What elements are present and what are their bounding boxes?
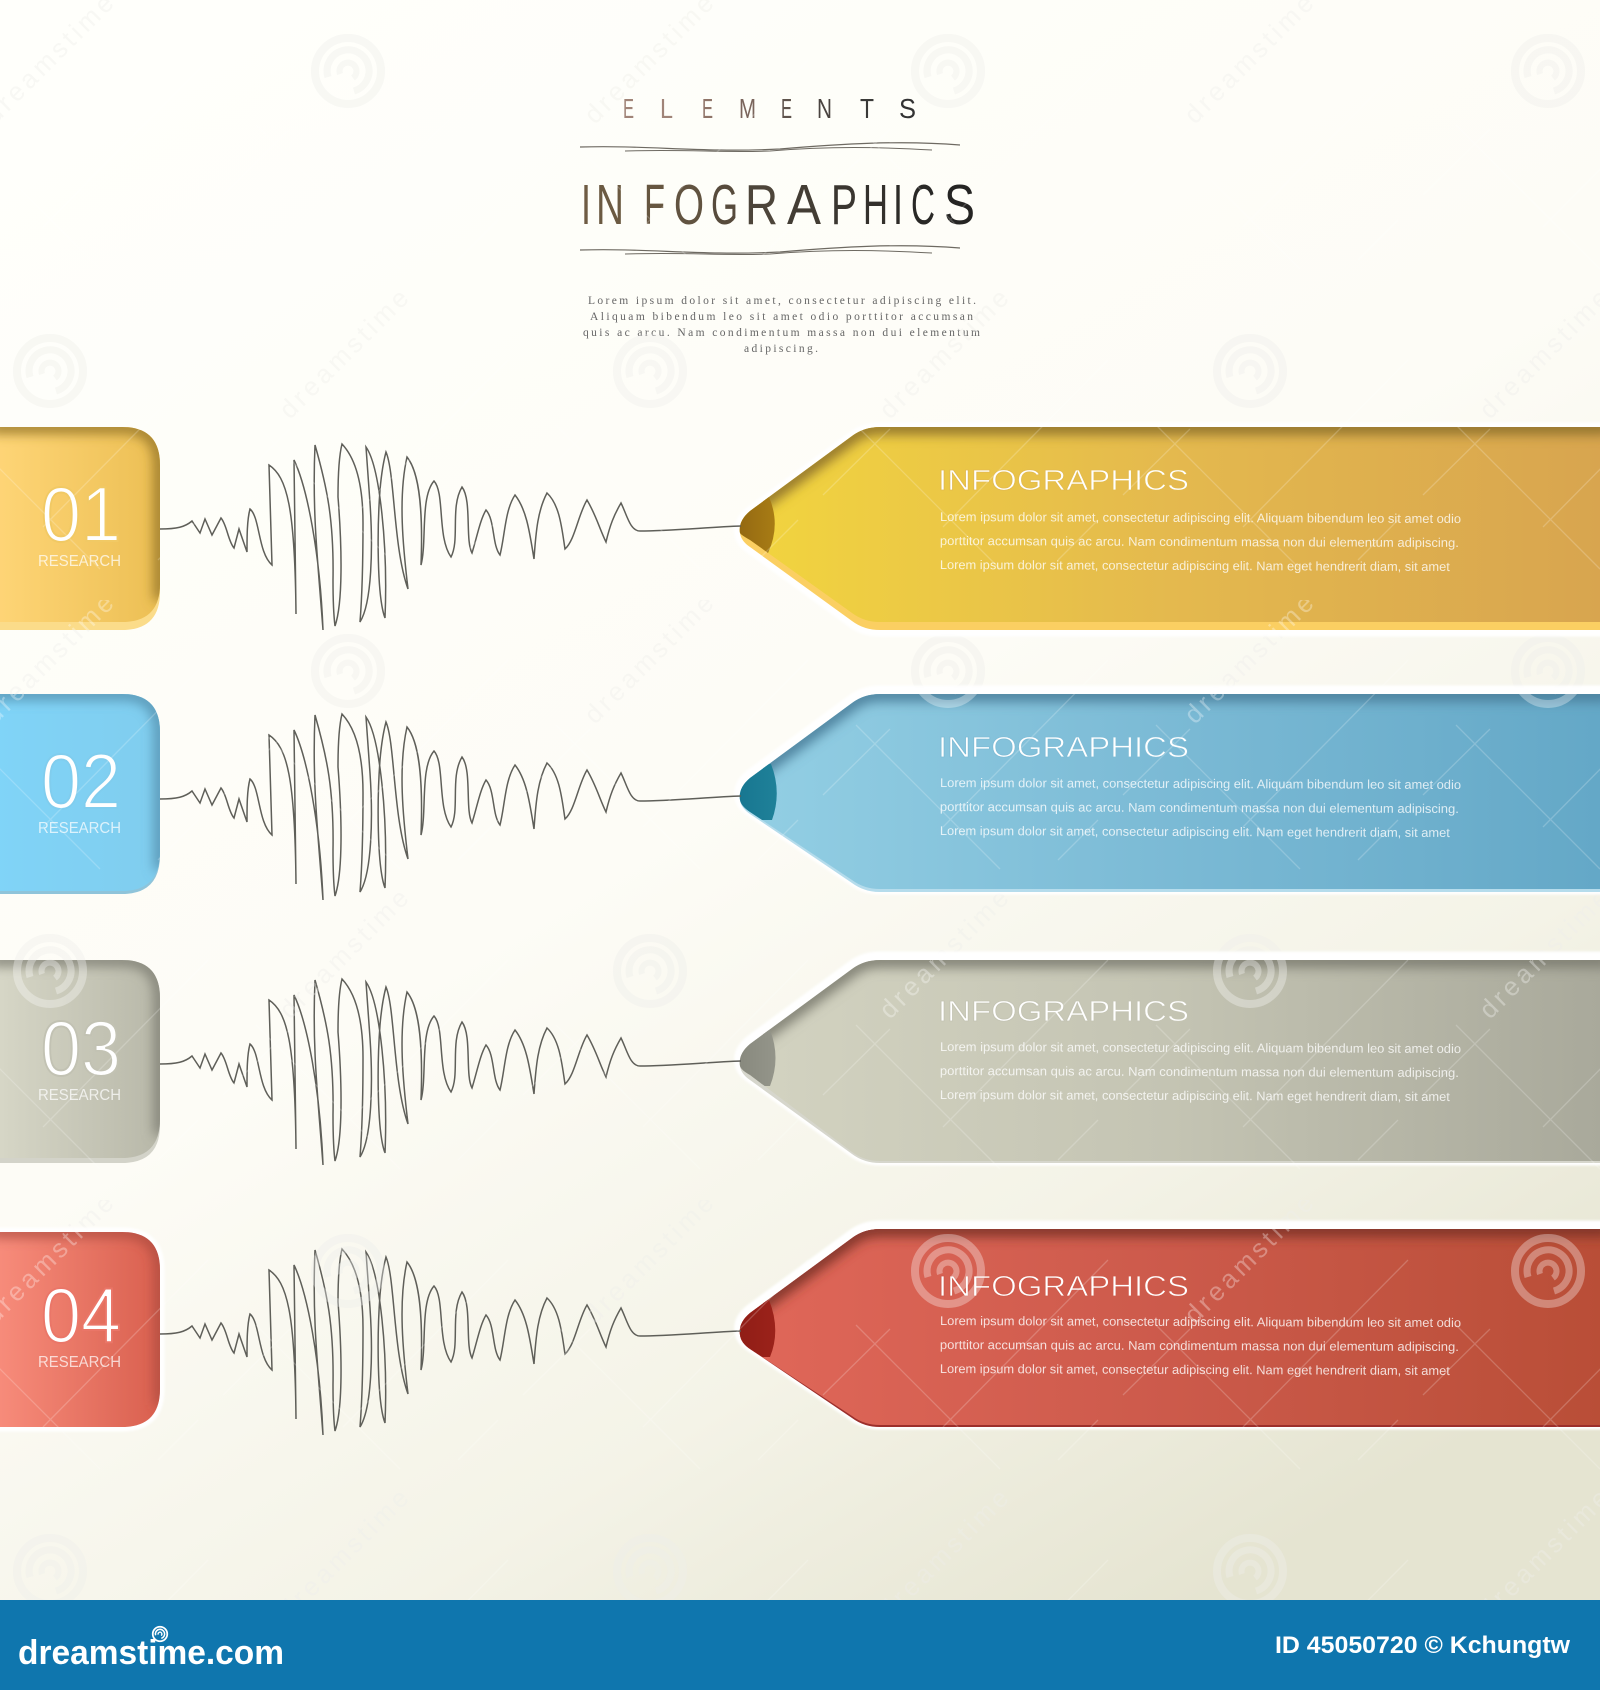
- heading: elements: L: [660, 93, 673, 124]
- footer image id: ID 45050720 © Kchungtw: [1275, 1632, 1570, 1659]
- pencil arrow panel 2: porttitor accumsan quis ac arcu. Nam condimentum massa non dui elementum adipiscing.: [940, 800, 1459, 816]
- pencil arrow panel 2: [700, 691, 1600, 892]
- intro paragraph: [583, 295, 980, 355]
- pencil arrow panel 2: Lorem ipsum dolor sit amet, consectetur adipiscing elit. Nam eget hendrerit diam, sit amet: [940, 824, 1450, 840]
- number tab 01: [0, 427, 160, 630]
- intro paragraph: Lorem ipsum dolor sit amet, consectetur adipiscing elit.: [588, 295, 976, 307]
- number tab 02: RESEARCH: [38, 820, 121, 837]
- heading: infographics: [581, 173, 975, 237]
- heading: elements: [623, 93, 916, 124]
- number tab 02: 02: [41, 737, 121, 825]
- row 3: grey: [0, 957, 1600, 1165]
- waveform line 1: [160, 444, 741, 630]
- heading: infographics: I: [581, 173, 591, 237]
- number tab 04: [0, 1232, 160, 1427]
- heading: elements: S: [899, 93, 916, 124]
- number tab 04: RESEARCH: [38, 1354, 121, 1371]
- heading: infographics: G: [711, 173, 738, 237]
- number tab 02: [0, 694, 160, 894]
- heading: infographics: R: [745, 173, 778, 237]
- pencil arrow panel 4: Lorem ipsum dolor sit amet, consectetur adipiscing elit. Aliquam bibendum leo sit amet odio: [940, 1314, 1461, 1330]
- intro paragraph: Aliquam bibendum leo sit amet odio porttitor accumsan: [590, 311, 973, 323]
- heading: infographics: H: [863, 173, 888, 237]
- footer logo spiral: [153, 1627, 167, 1641]
- heading: infographics: I: [893, 173, 903, 237]
- pencil arrow panel 4: porttitor accumsan quis ac arcu. Nam condimentum massa non dui elementum adipiscing.: [940, 1338, 1459, 1354]
- pencil arrow panel 2: INFOGRAPHICS: [938, 732, 1189, 764]
- row 4: red: [0, 1226, 1600, 1435]
- heading: elements: T: [860, 93, 874, 124]
- pencil arrow panel 4: [700, 1226, 1600, 1427]
- pencil arrow panel 4: INFOGRAPHICS: [938, 1271, 1189, 1303]
- waveform line 3: [160, 979, 741, 1165]
- heading: elements: E: [781, 93, 792, 124]
- heading: elements: M: [739, 93, 756, 124]
- number tab 01: RESEARCH: [38, 553, 121, 570]
- number tab 03: RESEARCH: [38, 1087, 121, 1104]
- number tab 03: [0, 960, 160, 1163]
- lower hand-drawn rule: [580, 246, 960, 255]
- number tab 03: 03: [41, 1004, 121, 1092]
- pencil arrow panel 3: INFOGRAPHICS: [938, 996, 1189, 1028]
- heading: elements: N: [817, 93, 832, 124]
- waveform line 2: [160, 714, 741, 900]
- pencil arrow panel 1: Lorem ipsum dolor sit amet, consectetur adipiscing elit. Nam eget hendrerit diam, sit amet: [940, 558, 1450, 574]
- pencil arrow panel 1: Lorem ipsum dolor sit amet, consectetur adipiscing elit. Aliquam bibendum leo sit amet odio: [940, 510, 1461, 526]
- intro paragraph: quis ac arcu. Nam condimentum massa non dui elementum: [583, 327, 980, 339]
- heading: infographics: F: [644, 173, 665, 237]
- number tab 01: 01: [41, 470, 121, 558]
- footer bar: [0, 1600, 1600, 1690]
- heading: elements: E: [623, 93, 634, 124]
- heading: elements: E: [702, 93, 713, 124]
- pencil arrow panel 2: Lorem ipsum dolor sit amet, consectetur adipiscing elit. Aliquam bibendum leo sit amet odio: [940, 776, 1461, 792]
- waveform line 4: [160, 1249, 741, 1435]
- pencil arrow panel 1: INFOGRAPHICS: [938, 465, 1189, 497]
- pencil arrow panel 1: porttitor accumsan quis ac arcu. Nam condimentum massa non dui elementum adipiscing.: [940, 534, 1459, 550]
- pencil arrow panel 3: Lorem ipsum dolor sit amet, consectetur adipiscing elit. Aliquam bibendum leo sit amet odio: [940, 1040, 1461, 1056]
- heading: infographics: A: [787, 173, 821, 237]
- footer logo text: dreamstime.com: [18, 1634, 284, 1672]
- pencil arrow panel 3: Lorem ipsum dolor sit amet, consectetur adipiscing elit. Nam eget hendrerit diam, sit amet: [940, 1088, 1450, 1104]
- upper hand-drawn rule: [580, 143, 960, 152]
- pencil arrow panel 4: Lorem ipsum dolor sit amet, consectetur adipiscing elit. Nam eget hendrerit diam, sit amet: [940, 1362, 1450, 1378]
- row 1: yellow: [0, 427, 1600, 631]
- number tab 04: 04: [41, 1271, 121, 1359]
- heading: infographics: S: [944, 173, 975, 237]
- heading: infographics: P: [831, 173, 857, 237]
- heading: infographics: C: [911, 173, 935, 237]
- row 2: blue: [0, 691, 1600, 900]
- heading: infographics: O: [674, 173, 704, 237]
- heading: infographics: N: [596, 173, 624, 237]
- pencil arrow panel 3: [700, 957, 1600, 1163]
- pencil arrow panel 1: [700, 427, 1600, 631]
- pencil arrow panel 3: porttitor accumsan quis ac arcu. Nam condimentum massa non dui elementum adipiscing.: [940, 1064, 1459, 1080]
- title block: [580, 93, 980, 355]
- intro paragraph: adipiscing.: [744, 343, 818, 355]
